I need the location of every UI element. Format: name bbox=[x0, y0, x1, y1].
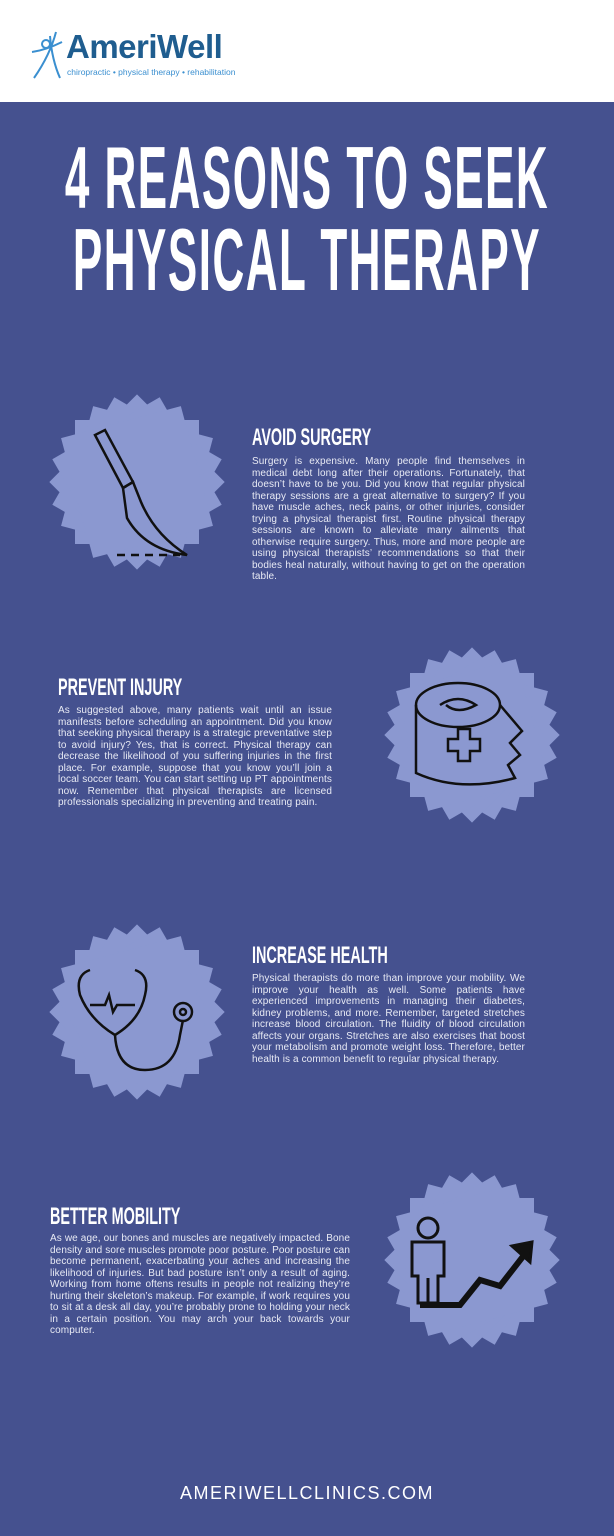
logo: chiropractic • physical therapy • rehabilitation bbox=[67, 67, 235, 77]
text: prevent injury: As suggested above, many patients wait until an issue manifests before scheduling an appointment. Did you know that seeking physical therapy is a strategic preventative step to avoid injury? Yes, that is correct. Physical therapy can decrease the likelihood of you suffering injuries in the first place. For example, suppose that you know you’ll join a local soccer team. You can start setting up PT appointments now. Remember that physical therapists are licensed professionals specializing in preventing and treating pain. bbox=[58, 705, 332, 808]
badge: scalpel bbox=[50, 394, 224, 570]
heading: prevent injury: PREVENT INJURY bbox=[58, 674, 182, 701]
heading: avoid surgery: AVOID SURGERY bbox=[252, 424, 371, 451]
logo: AmeriWell bbox=[66, 28, 222, 65]
footer url: AMERIWELLCLINICS.COM bbox=[180, 1483, 434, 1503]
heading: better mobility: BETTER MOBILITY bbox=[50, 1203, 180, 1230]
text: avoid surgery: Surgery is expensive. Many people find themselves in medical debt long after their operations. Fortunately, that doesn’t have to be you. Did you know that regular physical therapy sessions are a great alternative to surgery? If you have muscle aches, neck pains, or other injuries, consider trying a physical therapist first. Routine physical therapy sessions are known to alleviate many ailments that otherwise require surgery. Thus, more and more people are using physical therapists’ recommendations so that their bodies heal naturally, without having to get on the operation table. bbox=[252, 456, 525, 582]
text: better mobility: As we age, our bones and muscles are negatively impacted. Bone density and sore muscles promote poor posture. Poor posture can become permanent, exacerbating your aches and increasing the likelihood of injuries. But bad posture isn’t only a result of aging. Working from home oftens results in people not realizing they’re hurting their skeleton’s makeup. For example, if work requires you to sit at a desk all day, you’re probably prone to holding your neck in a certain position. You may arch your back towards your computer. bbox=[50, 1233, 350, 1336]
badge: bandage bbox=[384, 648, 560, 822]
heading: increase health: INCREASE HEALTH bbox=[252, 942, 388, 969]
logo bbox=[32, 28, 235, 79]
title: 4 REASONS TO SEEK bbox=[65, 128, 549, 227]
title: PHYSICAL THERAPY bbox=[73, 210, 541, 309]
title bbox=[65, 128, 549, 309]
badge: person with rising arrow bbox=[384, 1172, 560, 1348]
text: increase health: Physical therapists do more than improve your mobility. We improve your health as well. Some patients have experienced improvements in managing their diabetes, kidney problems, and more. Remember, targeted stretches increase blood circulation. The fluidity of blood circulation affects your organs. Stretches are also exercises that boost your metabolism and promote weight loss. Therefore, better health is a common benefit to regular physical therapy. bbox=[252, 973, 525, 1065]
header bbox=[0, 0, 614, 102]
badge: stethoscope bbox=[50, 924, 224, 1100]
